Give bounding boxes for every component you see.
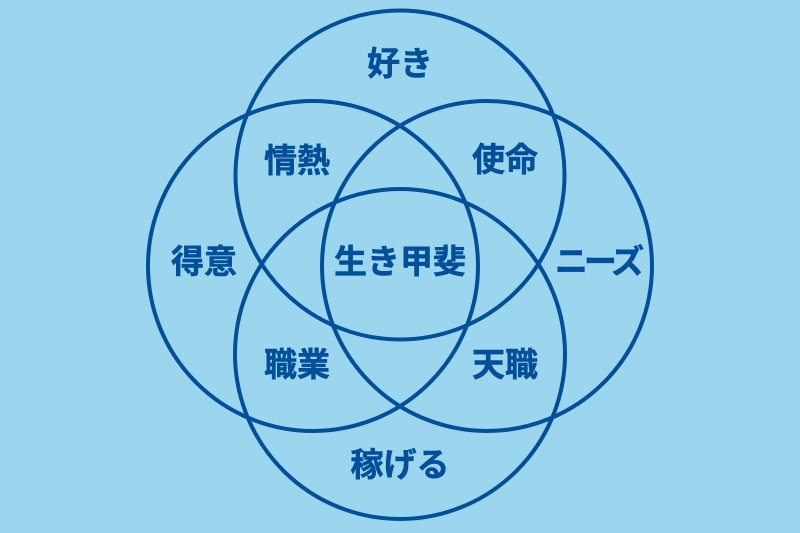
label: like: 好き [367, 45, 433, 82]
label: needs: ニーズ [555, 243, 644, 280]
label: profession: 職業 [264, 346, 330, 383]
label: ikigai: 生き甲斐 [334, 243, 466, 280]
label: mission: 使命 [472, 141, 538, 178]
circle: right [322, 101, 652, 431]
label: vocation: 天職 [472, 346, 538, 383]
label: good at: 得意 [171, 243, 237, 280]
circle: bottom [235, 189, 565, 519]
label: passion: 情熱 [264, 142, 330, 179]
circle: left [148, 101, 478, 431]
label: earn: 稼げる [350, 446, 450, 483]
circle: top [236, 10, 564, 340]
